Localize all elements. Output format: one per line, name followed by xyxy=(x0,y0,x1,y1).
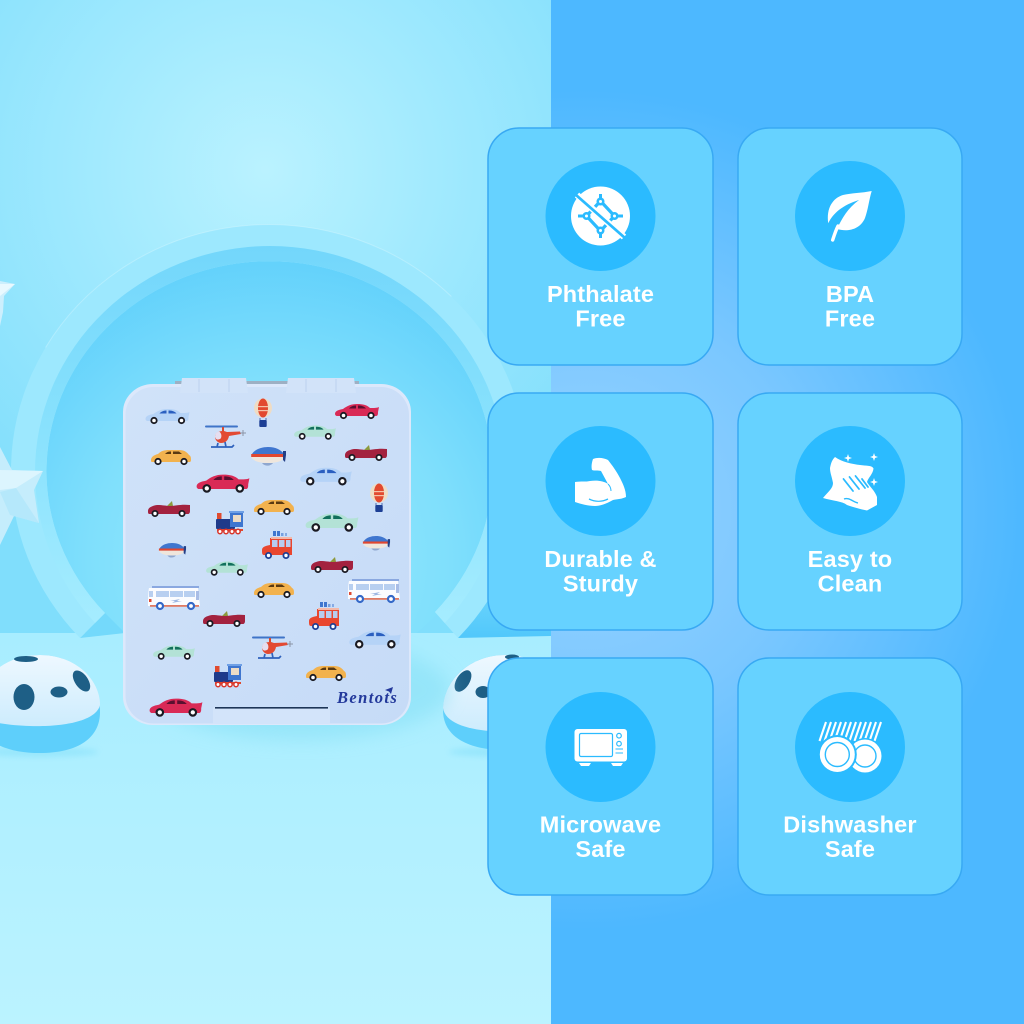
upper star xyxy=(0,281,15,326)
box lid xyxy=(123,384,411,725)
card: Dishwasher Safe: Safe xyxy=(825,836,875,862)
label: BPA xyxy=(826,281,874,307)
label: Dishwasher xyxy=(783,812,917,838)
label: Durable & xyxy=(544,546,657,572)
label: Easy to xyxy=(808,546,892,572)
icon: flexed arm xyxy=(575,458,626,506)
card: Phthalate Free xyxy=(488,128,713,365)
lunch box xyxy=(123,378,411,725)
card: Durable and Sturdy: Sturdy xyxy=(563,570,638,596)
icon: leaf xyxy=(828,191,872,240)
studio wall xyxy=(0,0,551,633)
label: Microwave xyxy=(540,812,661,838)
lower star xyxy=(0,447,43,545)
card: Easy to Clean xyxy=(738,393,962,630)
card: BPA Free xyxy=(738,128,962,365)
card: Phthalate Free: Free xyxy=(575,306,626,332)
hinges xyxy=(180,378,356,393)
brand logo: Bentots xyxy=(336,688,398,707)
left mushroom ornament xyxy=(0,655,100,757)
card: Microwave Safe: Safe xyxy=(575,836,626,862)
label: Phthalate xyxy=(547,281,654,307)
hinge pins xyxy=(175,381,359,389)
right mushroom ornament xyxy=(443,654,570,757)
latch xyxy=(213,707,330,724)
floor shadow of lunch box xyxy=(150,640,450,740)
card: Easy to Clean: Clean xyxy=(818,570,882,596)
floor xyxy=(0,633,551,1024)
vehicle pattern xyxy=(146,398,401,717)
icon: microwave xyxy=(574,729,627,766)
arch decoration xyxy=(11,224,551,638)
icon: dishes under water xyxy=(818,722,883,774)
icon: phthalate molecule crossed out xyxy=(571,186,630,246)
card: Durable and Sturdy xyxy=(488,393,713,630)
icon: hand wiping with cloth xyxy=(823,453,878,510)
card: Microwave Safe xyxy=(488,658,713,895)
panel: left product scene xyxy=(0,0,570,1024)
panel: right blue background xyxy=(551,0,1024,1024)
card: BPA Free: Free xyxy=(825,306,875,332)
card: Dishwasher Safe xyxy=(738,658,962,895)
